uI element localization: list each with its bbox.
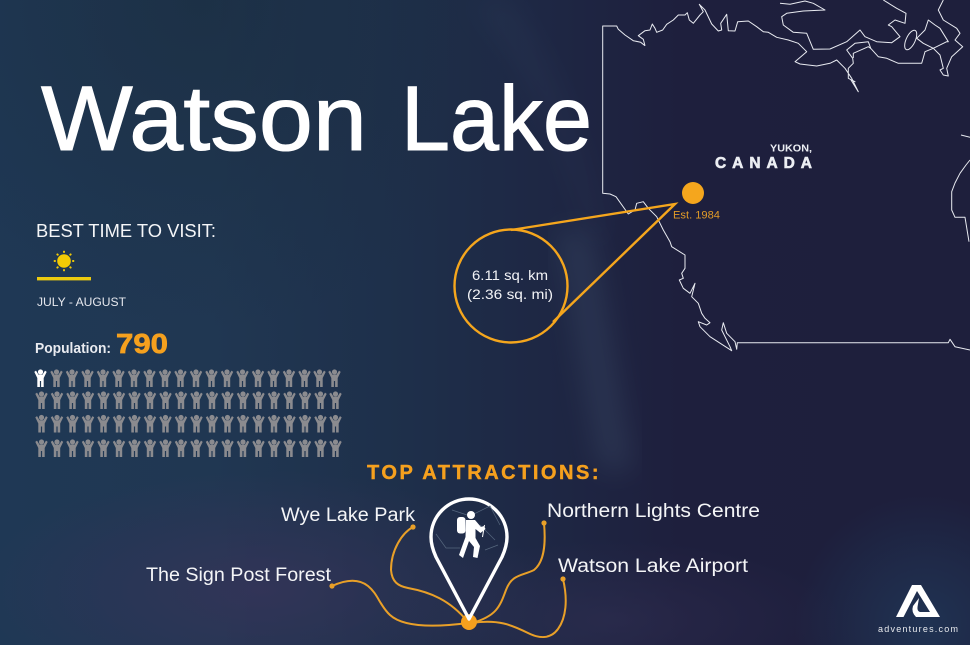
attraction labels: Wye Lake Park [281, 505, 416, 526]
region label [715, 142, 812, 172]
population number: 790 [116, 328, 168, 359]
area text: 6.11 sq. km [472, 268, 548, 283]
attractions heading: TOP ATTRACTIONS: [367, 462, 601, 484]
callout: area circle with pointer [454, 204, 675, 342]
east coast fragments [961, 135, 970, 137]
map: Yukon and Canada outline [603, 0, 970, 351]
attraction labels: Northern Lights Centre [547, 501, 760, 522]
title: Lake [401, 68, 592, 170]
highlighted person [34, 369, 47, 387]
logo: adventures.com: adventures.com [878, 624, 958, 634]
map pin [431, 499, 507, 619]
established label: Est. 1984 [673, 210, 720, 222]
attraction labels: The Sign Post Forest [146, 565, 332, 586]
icon: hiker [457, 511, 486, 558]
connector lines [332, 523, 566, 637]
season label: JULY - AUGUST [37, 295, 127, 309]
season bar [37, 277, 91, 280]
area text [467, 268, 553, 302]
population label: Population: [35, 340, 111, 357]
area text: (2.36 sq. mi) [467, 287, 553, 302]
region label: YUKON, [770, 142, 812, 154]
pictogram: population [34, 369, 342, 457]
logo: adventures.com [878, 585, 958, 634]
attraction labels [146, 501, 760, 586]
region label: CANADA [715, 155, 812, 172]
origin dot [461, 614, 477, 630]
inner bay lines [853, 47, 871, 58]
Yukon border and Pacific coast [603, 26, 970, 351]
best time heading: BEST TIME TO VISIT: [36, 221, 216, 241]
Arctic coast [638, 0, 963, 92]
pin map texture [436, 506, 500, 550]
title: Watson [41, 68, 367, 170]
location dot [682, 182, 704, 204]
title [41, 68, 592, 170]
attraction labels: Watson Lake Airport [558, 556, 749, 577]
connector endpoints [329, 520, 566, 589]
icon: sun [55, 252, 73, 270]
